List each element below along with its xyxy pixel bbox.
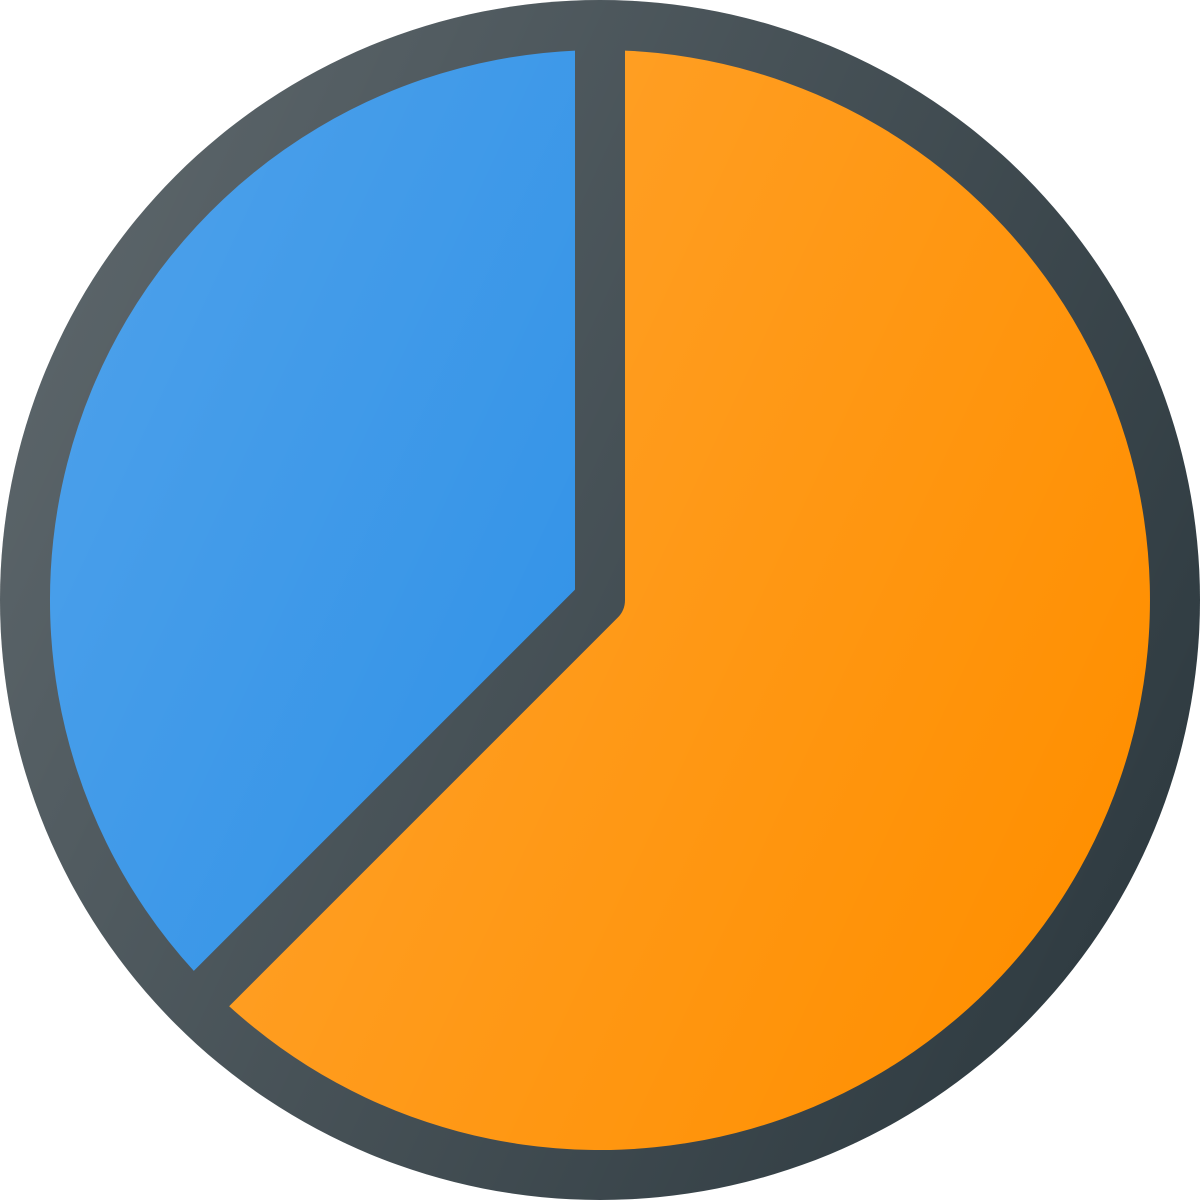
orange slice (229, 51, 1150, 1150)
blue slice (50, 51, 575, 971)
